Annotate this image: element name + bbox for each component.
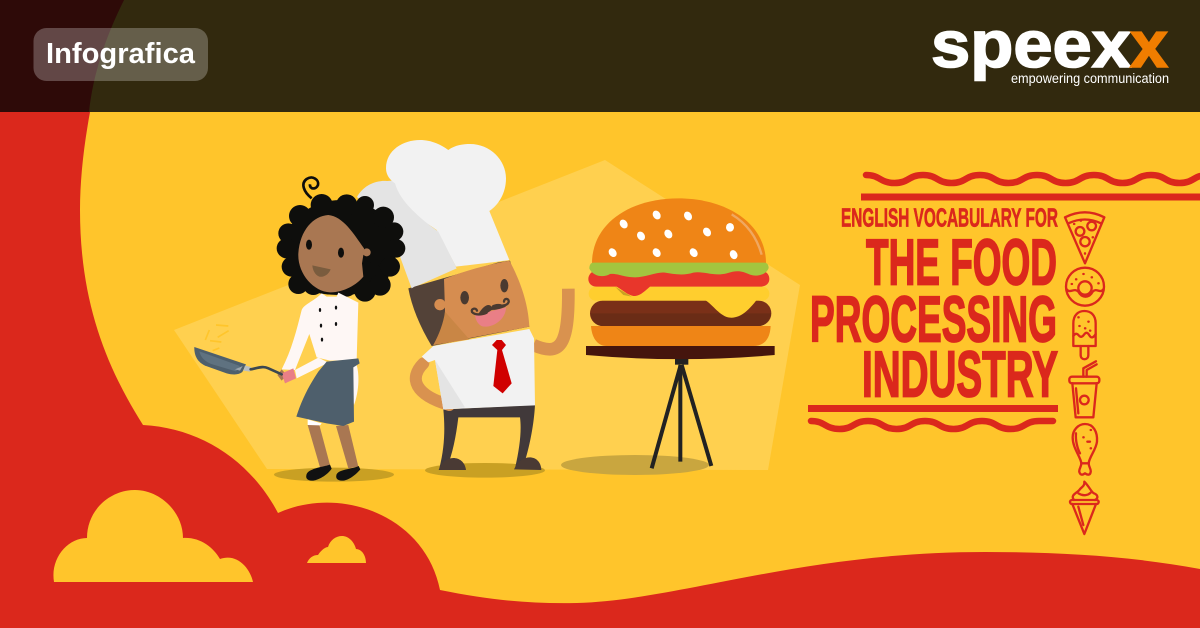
icon: small cloud bbox=[307, 536, 366, 563]
title block bbox=[808, 175, 1200, 429]
icon: drink cup bbox=[1069, 361, 1099, 417]
illustration: burger on table bbox=[561, 198, 775, 475]
badge: Infografica bbox=[34, 28, 208, 81]
icon: large cloud bbox=[53, 490, 253, 582]
top wavy line bbox=[866, 175, 1200, 183]
light spotlight polygon bbox=[174, 160, 800, 470]
top straight line bbox=[861, 194, 1200, 200]
character: male chef bbox=[357, 140, 568, 478]
food icons column bbox=[1065, 212, 1104, 534]
badge: Infografica: Infografica bbox=[46, 38, 196, 70]
icon: ice lolly bbox=[1073, 311, 1096, 359]
heading line: The food: THE FOOD bbox=[866, 226, 1057, 298]
top dark band bbox=[0, 0, 1200, 112]
logo: speexx: empowering communication bbox=[1011, 71, 1169, 86]
bottom straight line bbox=[808, 405, 1058, 412]
heading line: English vocabulary for: ENGLISH VOCABULARY FOR bbox=[841, 204, 1058, 232]
character: female chef bbox=[194, 178, 405, 482]
icon: ice cream cone bbox=[1070, 482, 1099, 534]
dark red corner of band bbox=[0, 0, 124, 112]
bottom wavy line bbox=[811, 421, 1053, 429]
icon: pizza bbox=[1065, 212, 1104, 263]
icon: chicken drumstick bbox=[1073, 424, 1097, 475]
heading line: Industry: INDUSTRY bbox=[862, 338, 1058, 410]
logo: speexx: speex bbox=[931, 7, 1131, 81]
icon: donut bbox=[1066, 268, 1104, 306]
logo: speexx: x bbox=[1130, 7, 1168, 81]
